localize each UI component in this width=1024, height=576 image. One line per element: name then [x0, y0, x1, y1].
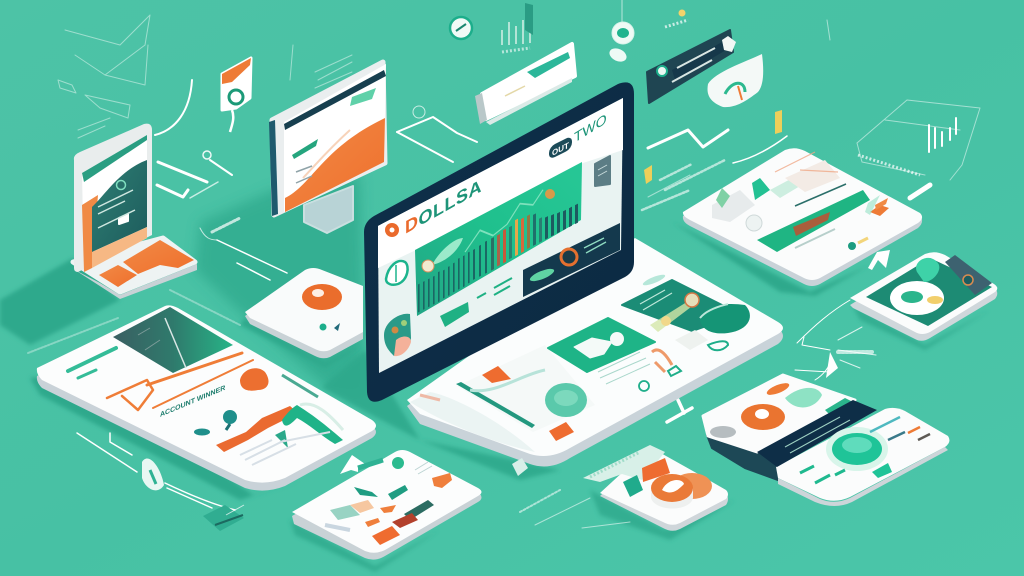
mound button [700, 304, 750, 333]
small card right [850, 252, 997, 341]
green arrow tail [358, 460, 383, 468]
dark green card [622, 280, 740, 331]
pale sheet [583, 445, 665, 482]
green labels [354, 487, 378, 497]
teal sheet edge [456, 382, 535, 428]
big base tablet [407, 238, 783, 466]
leaf icon [386, 261, 408, 285]
orange pad [432, 473, 452, 488]
wireframe chart top right [857, 100, 980, 198]
line art lower right [667, 300, 876, 422]
white cubes [712, 190, 755, 222]
side labels [870, 417, 930, 440]
orange badge bottom center [583, 445, 728, 531]
white pill [910, 185, 930, 198]
monitor frame [272, 62, 385, 215]
bar chart [418, 172, 578, 312]
dark sub panel [523, 223, 620, 297]
left white flap [703, 375, 855, 452]
main monitor [364, 82, 634, 402]
header band [378, 98, 623, 268]
lower widgets [440, 302, 469, 327]
orange chart lines [107, 353, 253, 410]
gray rows [240, 432, 330, 465]
monitor stand [304, 186, 353, 233]
bottom side details [598, 273, 728, 391]
yellow tabs [644, 110, 782, 184]
orange wave [285, 118, 385, 212]
food icon [384, 314, 411, 356]
dark photo [113, 307, 233, 373]
pill label: OUT [552, 140, 570, 158]
orange base keys [99, 240, 194, 287]
orange notes [482, 366, 511, 383]
navy band [757, 400, 877, 467]
card lower right [703, 375, 949, 506]
connector lines left [28, 80, 287, 353]
orange tag with green mark [222, 58, 251, 132]
title: DOLLSA [405, 175, 482, 239]
monitor bezel [364, 82, 634, 402]
small cup icon bottom center [512, 458, 528, 476]
connecting arrow bottom [340, 455, 368, 474]
orange button [302, 284, 342, 310]
tablet frame [74, 124, 152, 272]
dark underside [707, 435, 778, 480]
card bottom center left [292, 450, 482, 560]
chart panel [415, 162, 582, 316]
large tablet left [37, 305, 376, 491]
inner paper sheet [457, 345, 595, 432]
green card [548, 318, 655, 372]
orange tab [642, 458, 670, 482]
desktop monitor [269, 62, 386, 233]
side labels [870, 205, 889, 216]
stand base [73, 238, 195, 292]
puck with orange button [245, 268, 363, 358]
puck icons [320, 324, 326, 330]
badge base [600, 450, 728, 531]
orange button [741, 404, 785, 430]
tablet screen [82, 135, 147, 272]
tablet top right [683, 148, 922, 286]
key icon and lines bottom left [77, 433, 244, 531]
dark card top right [647, 30, 763, 107]
back disc [672, 473, 712, 499]
line art: right connectors [397, 20, 830, 210]
monitor screen [284, 64, 386, 212]
line chart [465, 190, 543, 252]
green cube [203, 505, 244, 531]
cast shadows [0, 175, 990, 572]
white arrow near small card [868, 250, 890, 270]
phone stand device [73, 124, 197, 299]
main white body [776, 408, 949, 501]
orange blob [240, 368, 269, 391]
green ring [826, 427, 888, 471]
front disc [651, 488, 693, 508]
faint line bottom center [520, 490, 630, 528]
monitor labels [350, 88, 376, 106]
floating card top center [475, 44, 575, 125]
green swoosh [282, 405, 343, 444]
line art: top left wireframes [58, 15, 352, 138]
dark caption: ACCOUNT WINNER [160, 383, 226, 419]
teal figures [223, 410, 237, 424]
logo [385, 223, 399, 237]
color chips [350, 500, 374, 513]
header text: TWO [574, 111, 607, 147]
chart leaf icons [432, 238, 463, 265]
top center icons [450, 0, 688, 64]
green bars [68, 348, 116, 378]
gray side card [595, 156, 610, 186]
tablet text lines [98, 190, 135, 228]
dark divider [795, 184, 846, 206]
green chip [623, 475, 643, 497]
orange bar [216, 406, 298, 452]
monitor screen [378, 98, 623, 373]
dark pill [549, 136, 572, 160]
disk icon [890, 281, 944, 315]
green banner [757, 190, 870, 252]
green circle [545, 383, 587, 417]
white blob [708, 54, 763, 107]
